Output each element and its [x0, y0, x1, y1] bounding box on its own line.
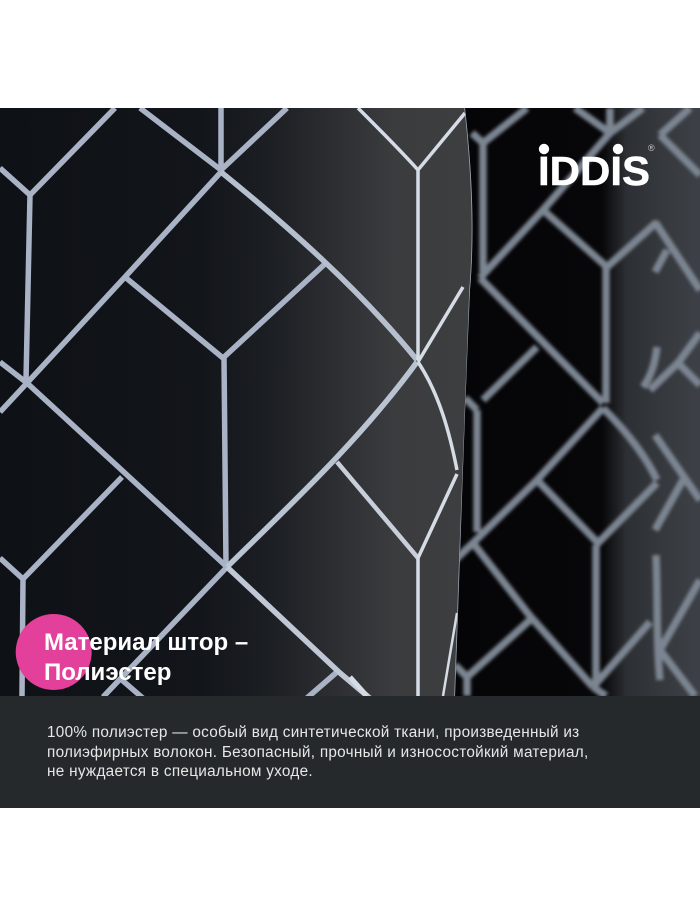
heading — [44, 629, 248, 686]
background curtain, out of focus — [440, 108, 700, 696]
heading: Материал штор – — [44, 629, 248, 656]
text block: description: 100% полиэстер — особый вид синтетической ткани, произведенный из — [47, 724, 580, 741]
text block: description: не нуждается в специальном уходе. — [47, 763, 313, 780]
curtain photograph with geometric pattern — [0, 108, 700, 696]
panel: description — [0, 696, 700, 808]
text block: description: полиэфирных волокон. Безопасный, прочный и износостойкий материал, — [47, 744, 589, 761]
heading: Полиэстер — [44, 659, 171, 686]
icon: pink circle accent — [16, 614, 92, 690]
logo: IDDIS: IDDIS — [538, 148, 650, 194]
logo: IDDIS: ® — [648, 143, 655, 153]
text block: description — [47, 724, 589, 780]
foreground curtain with sharp pattern — [0, 108, 480, 700]
